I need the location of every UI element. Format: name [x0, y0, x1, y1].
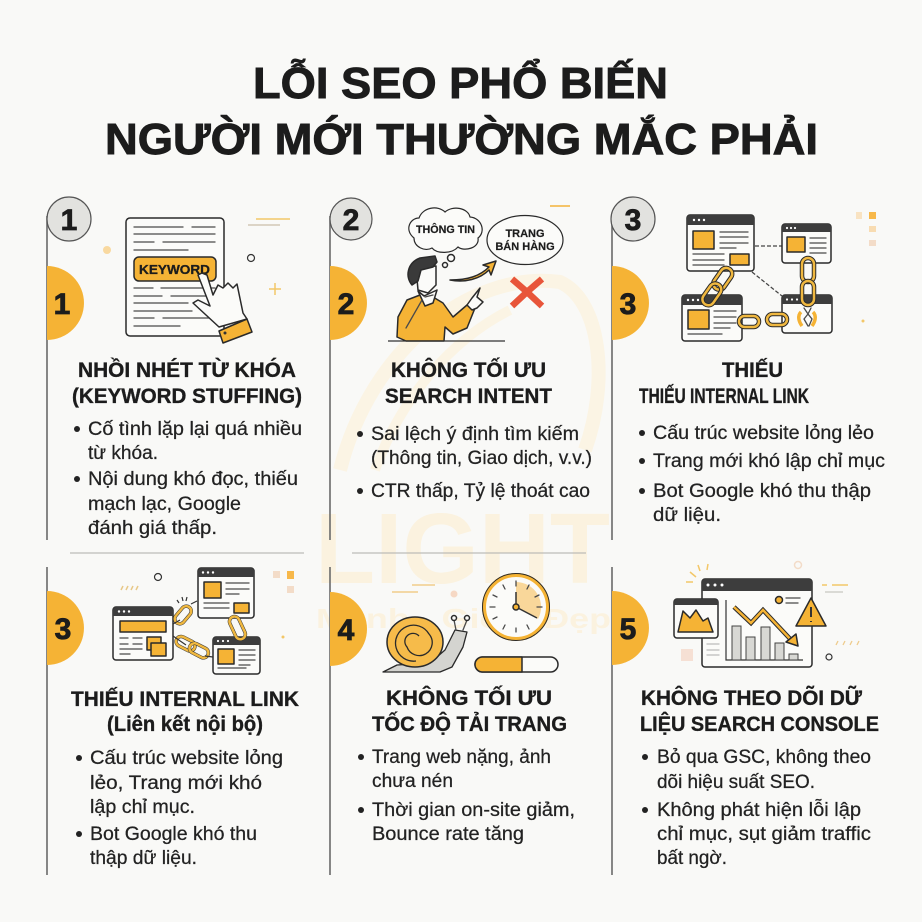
- bullet list: [639, 423, 885, 526]
- heading: KHÔNG TỐI ƯU: [391, 358, 546, 382]
- heading: KHÔNG THEO DÕI DỮ: [641, 686, 863, 710]
- bullet list: Bounce rate tăng: [372, 824, 524, 845]
- watermark logo: LIGHT: [315, 493, 610, 605]
- divider lines: [70, 552, 586, 554]
- bullet list: Cố tình lặp lại quá nhiều: [88, 419, 302, 440]
- grey number badge 3: 3: [625, 204, 641, 237]
- orange number badge 2: 2: [338, 288, 354, 321]
- title: LỖI SEO PHỔ BIẾN: [253, 57, 668, 108]
- panel: internal link missing top: [611, 197, 885, 540]
- icon: confused person with thought bubbles: [388, 206, 570, 341]
- title: [105, 57, 818, 164]
- bullet list: Bot Google khó thu: [90, 824, 257, 845]
- bullet list: Sai lệch ý định tìm kiếm: [371, 424, 579, 445]
- bullet list: [357, 424, 592, 502]
- bullet list: đánh giá thấp.: [88, 518, 217, 539]
- bullet list: (Thông tin, Giao dịch, v.v.): [371, 448, 592, 469]
- icon: document with keyword and pointing hand: [103, 218, 290, 343]
- bullet list: Cấu trúc website lỏng: [90, 748, 283, 769]
- orange number badge 3: 3: [55, 613, 71, 646]
- bullet list: dữ liệu.: [653, 505, 721, 526]
- grey number badge 2: 2: [343, 204, 359, 237]
- heading: TỐC ĐỘ TẢI TRANG: [372, 712, 567, 736]
- orange number badge 3: 3: [620, 288, 636, 321]
- icon: analytics dashboard with falling chart: [674, 562, 859, 667]
- grey number badge 1: [47, 197, 91, 241]
- heading: [385, 358, 552, 408]
- heading: [640, 686, 879, 736]
- icon: confused person with thought bubbles: BÁN HÀNG: [495, 240, 555, 253]
- bullet list: [74, 419, 302, 539]
- bullet list: Bỏ qua GSC, không theo: [657, 747, 871, 768]
- watermark logo: Mạnh - Giỏi - Đẹp: [316, 603, 611, 634]
- icon: broken link windows: [113, 568, 294, 674]
- panel: page speed: [330, 567, 575, 875]
- bullet list: dõi hiệu suất SEO.: [657, 772, 815, 793]
- bullet list: lẻo, Trang mới khó: [90, 773, 262, 794]
- panel: search console: [612, 562, 879, 875]
- heading: [372, 686, 567, 736]
- heading: KHÔNG TỐI ƯU: [386, 686, 552, 710]
- bullet list: Cấu trúc website lỏng lẻo: [653, 423, 874, 444]
- panel: search intent: [330, 198, 592, 540]
- orange number badge 1: [47, 266, 84, 340]
- grey number badge 2: [330, 198, 372, 240]
- bullet list: Trang web nặng, ảnh: [372, 747, 551, 768]
- icon: linked browser windows: [682, 212, 876, 341]
- heading: THIẾU: [722, 359, 783, 382]
- watermark logo: [315, 281, 611, 634]
- orange number badge 3: [47, 591, 84, 665]
- icon: document with keyword and pointing hand: KEYWORD: [139, 262, 210, 277]
- bullet list: Không phát hiện lỗi lập: [657, 799, 861, 821]
- bullet list: chỉ mục, sụt giảm traffic: [657, 824, 871, 845]
- heading: SEARCH INTENT: [385, 385, 552, 408]
- heading: NHỒI NHÉT TỪ KHÓA: [78, 358, 296, 382]
- orange number badge 1: 1: [54, 288, 70, 321]
- orange number badge 5: [612, 591, 649, 665]
- icon: confused person with thought bubbles: TRANG: [505, 228, 545, 240]
- bullet list: thập dữ liệu.: [90, 848, 197, 869]
- heading: [71, 688, 299, 736]
- icon: snail and clock: [383, 574, 558, 672]
- bullet list: mạch lạc, Google: [88, 494, 241, 515]
- bullet list: lập chỉ mục.: [90, 797, 195, 818]
- bullet list: [358, 747, 575, 845]
- orange number badge 4: [330, 592, 367, 666]
- icon: confused person with thought bubbles: THÔNG TIN: [416, 223, 475, 236]
- bullet list: Nội dung khó đọc, thiếu: [88, 469, 298, 490]
- bullet list: [76, 748, 283, 869]
- orange number badge 2: [330, 266, 367, 340]
- bullet list: từ khóa.: [88, 443, 158, 464]
- orange number badge 3: [612, 266, 649, 340]
- heading: (KEYWORD STUFFING): [72, 385, 302, 408]
- title: NGƯỜI MỚI THƯỜNG MẮC PHẢI: [105, 114, 818, 164]
- heading: [639, 359, 809, 408]
- heading: THIẾU INTERNAL LINK: [71, 688, 299, 711]
- bullet list: CTR thấp, Tỷ lệ thoát cao: [371, 481, 590, 502]
- panel: internal link: [47, 567, 299, 875]
- bullet list: chưa nén: [372, 771, 453, 792]
- bullet list: [642, 747, 871, 869]
- orange number badge 5: 5: [620, 613, 636, 646]
- bullet list: Thời gian on-site giảm,: [372, 800, 575, 821]
- grey number badge 1: 1: [61, 204, 77, 237]
- bullet list: Trang mới khó lập chỉ mục: [653, 451, 885, 472]
- bullet list: Bot Google khó thu thập: [653, 481, 871, 502]
- heading: [72, 358, 302, 408]
- bullet list: bất ngờ.: [657, 848, 727, 869]
- orange number badge 4: 4: [338, 614, 355, 647]
- heading: (Liên kết nội bộ): [107, 713, 263, 736]
- heading: THIẾU INTERNAL LINK: [639, 385, 809, 408]
- heading: LIỆU SEARCH CONSOLE: [640, 712, 879, 736]
- grey number badge 3: [611, 197, 655, 241]
- panel: keyword stuffing: [47, 197, 302, 540]
